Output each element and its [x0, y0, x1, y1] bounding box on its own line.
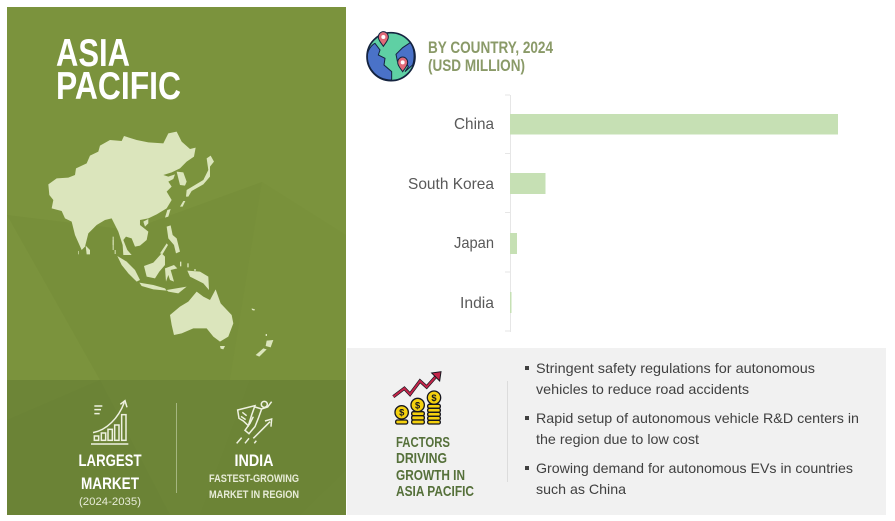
- title: ASIA: [56, 32, 130, 75]
- text: factor list: [525, 360, 859, 497]
- text: factor list: Rapid setup of autonomous vehicle R&D centers in: [536, 410, 859, 426]
- text: largest market: MARKET: [81, 474, 139, 493]
- panel: growth factors: [347, 348, 886, 515]
- text: India: [209, 451, 299, 501]
- text: largest market: [78, 451, 142, 508]
- bar labels: India: [460, 295, 494, 312]
- text: largest market: (2024-2035): [79, 496, 141, 508]
- icon: rising coins: $: [415, 400, 421, 410]
- text: factors heading: ASIA PACIFIC: [396, 483, 474, 500]
- text: factor list: Growing demand for autonomous EVs in countries: [536, 460, 853, 476]
- text: factor list: the region due to low cost: [536, 431, 699, 447]
- text: factor list: Stringent safety regulations for autonomous: [536, 360, 815, 376]
- icon: flying hero: [237, 401, 272, 443]
- icon: rising coins: $: [431, 393, 437, 403]
- title: PACIFIC: [56, 65, 181, 108]
- bar chart: [408, 95, 838, 332]
- text: factor list: vehicles to reduce road accidents: [536, 381, 749, 397]
- bars: [510, 114, 838, 313]
- text: factor list: such as China: [536, 481, 626, 497]
- panel: Asia Pacific region: [7, 7, 346, 380]
- map: Asia Pacific: [48, 132, 273, 357]
- bar labels: [408, 116, 494, 312]
- heading: by country: [428, 39, 554, 75]
- bar labels: China: [454, 116, 494, 133]
- heading: by country: BY COUNTRY, 2024: [428, 39, 554, 57]
- text: India: INDIA: [234, 451, 274, 470]
- text: India: MARKET IN REGION: [209, 489, 299, 501]
- text: India: FASTEST-GROWING: [209, 473, 299, 485]
- icon: globe with pins: [367, 32, 415, 81]
- text: factors heading: DRIVING: [396, 450, 447, 467]
- icon: rising coins: $: [399, 408, 405, 418]
- text: factors heading: [396, 434, 474, 500]
- text: largest market: LARGEST: [78, 451, 142, 470]
- icon: growth chart: [91, 401, 128, 444]
- icon: rising coins: [393, 372, 441, 424]
- title: [56, 32, 181, 108]
- bar labels: Japan: [454, 235, 494, 252]
- panel: market highlights: [7, 380, 346, 515]
- heading: by country: (USD MILLION): [428, 57, 525, 75]
- text: factors heading: FACTORS: [396, 434, 450, 451]
- text: factors heading: GROWTH IN: [396, 467, 465, 484]
- bar labels: South Korea: [408, 176, 494, 193]
